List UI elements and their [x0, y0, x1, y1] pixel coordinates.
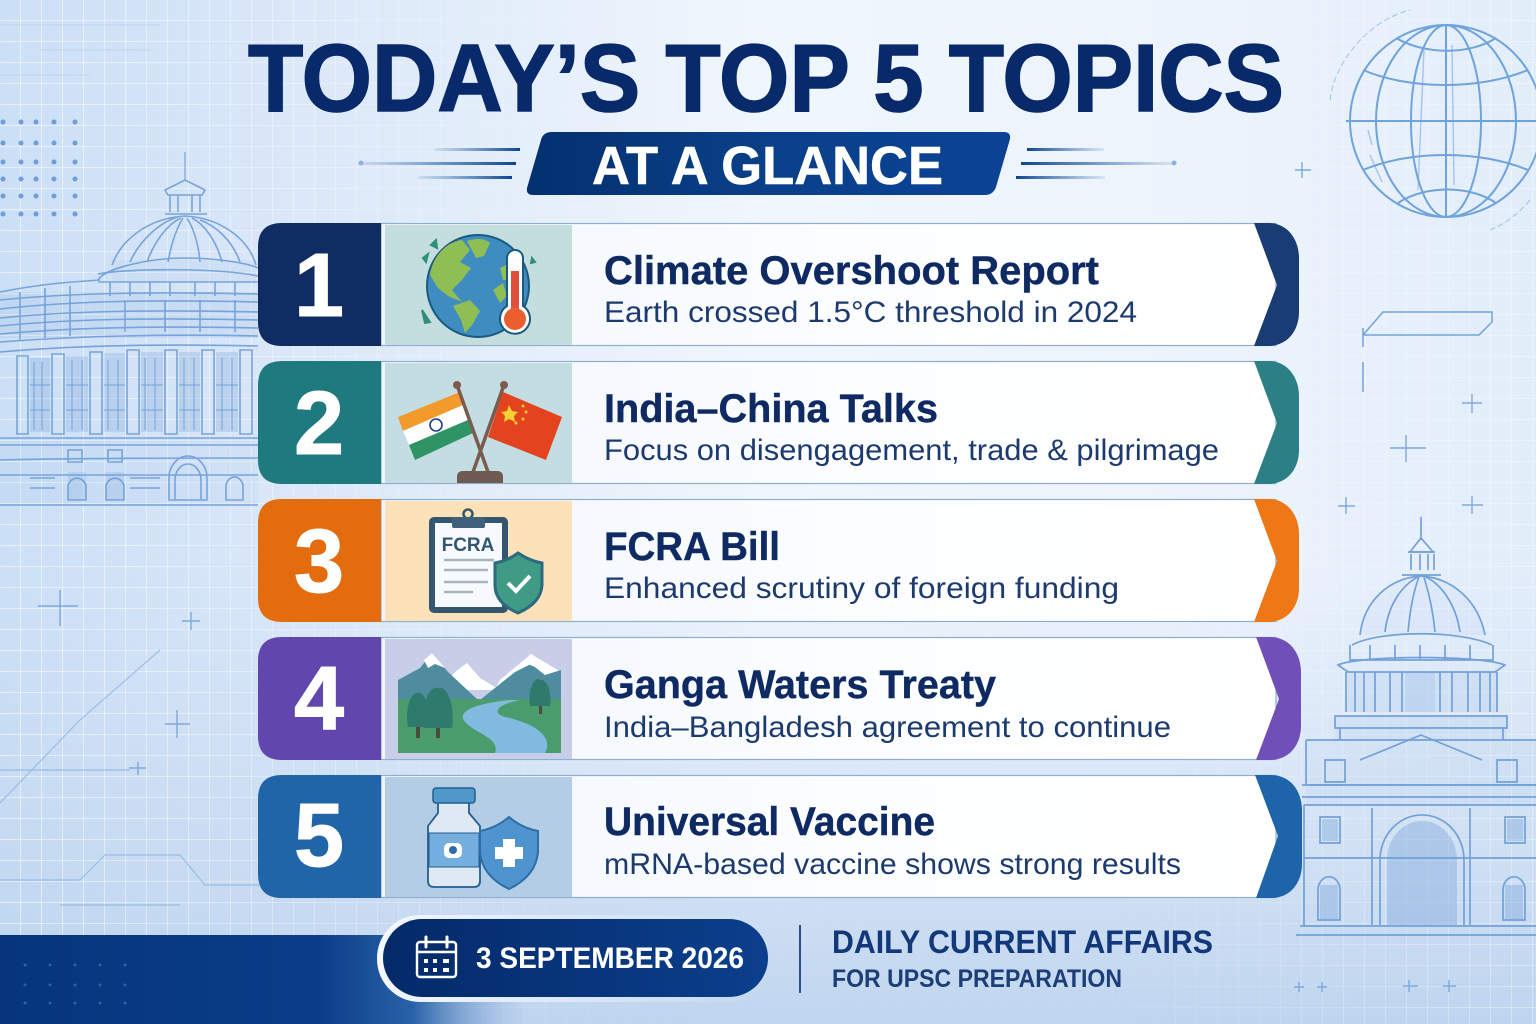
panel: topic 3 — [258, 499, 1299, 622]
panel: topic 5 — [258, 775, 1302, 898]
heading: topic 2: India–China Talks — [604, 387, 938, 431]
text: topic 1 summary: Earth crossed 1.5°C threshold in 2024 — [604, 296, 1137, 329]
right globe sketch — [1330, 10, 1536, 230]
number badge 4: 4 — [294, 649, 344, 749]
chevron: topic 1 — [1254, 223, 1299, 346]
text: topic 3 summary: Enhanced scrutiny of foreign funding — [604, 572, 1119, 605]
icon: globe with thermometer — [422, 235, 535, 337]
icon: mountains and river landscape — [398, 653, 561, 753]
right building shaded door and windows — [1306, 576, 1536, 925]
chevron: topic 3 — [1254, 499, 1299, 622]
footer bar — [0, 935, 530, 1024]
panel: topic 2 — [258, 361, 1299, 484]
heading: topic 5: Universal Vaccine — [604, 800, 935, 844]
chevron: topic 4 — [1256, 637, 1301, 760]
decorative speed lines right — [1016, 148, 1176, 179]
footer text: FOR UPSC PREPARATION — [832, 965, 1122, 993]
footer text — [832, 924, 1213, 993]
icon: calendar — [417, 937, 456, 977]
number badge 3 — [258, 499, 381, 622]
icon: FCRA clipboard and shield — [429, 510, 542, 613]
number badge 1 — [258, 223, 381, 346]
heading: topic 3: FCRA Bill — [604, 525, 780, 569]
faint top-left blueprint lines — [0, 25, 160, 75]
icon: vaccine vial and shield — [428, 788, 538, 889]
subtitle banner: AT A GLANCE — [592, 136, 943, 196]
date text: 3 SEPTEMBER 2026 — [476, 942, 744, 975]
text: topic 2 summary: Focus on disengagement, trade & pilgrimage — [604, 434, 1219, 467]
title: TODAY’S TOP 5 TOPICS — [248, 25, 1284, 132]
panel: topic 4 — [258, 637, 1301, 760]
scattered plus marks — [38, 162, 1483, 992]
number badge 5 — [258, 775, 381, 898]
date pill — [377, 915, 772, 1002]
icon: crossed India and China flags — [398, 381, 562, 483]
right capitol building sketch — [1296, 517, 1536, 935]
decorative speed lines left — [358, 148, 520, 179]
left parliament building sketch — [0, 152, 258, 505]
heading: topic 4: Ganga Waters Treaty — [604, 663, 997, 707]
chevron: topic 5 — [1255, 775, 1302, 898]
icon: FCRA clipboard and shield: FCRA — [442, 535, 495, 556]
panel: topic 1 — [258, 223, 1299, 346]
text: topic 4 summary: India–Bangladesh agreement to continue — [604, 711, 1171, 744]
lower left blueprint lines — [0, 650, 260, 905]
chevron: topic 2 — [1254, 361, 1299, 484]
number badge 2: 2 — [294, 374, 344, 474]
number badge 2 — [258, 361, 381, 484]
number badge 5: 5 — [294, 786, 344, 886]
heading: topic 1: Climate Overshoot Report — [604, 249, 1099, 293]
left building shaded tone — [0, 260, 258, 505]
number badge 3: 3 — [294, 512, 344, 612]
footer text: DAILY CURRENT AFFAIRS — [832, 924, 1213, 960]
dot grid top left — [0, 120, 78, 216]
right blueprint bar sketch — [1363, 312, 1492, 392]
number badge 4 — [258, 637, 381, 760]
footer divider — [799, 925, 801, 993]
text: topic 5 summary: mRNA-based vaccine shows strong results — [604, 848, 1181, 881]
number badge 1: 1 — [294, 236, 344, 336]
